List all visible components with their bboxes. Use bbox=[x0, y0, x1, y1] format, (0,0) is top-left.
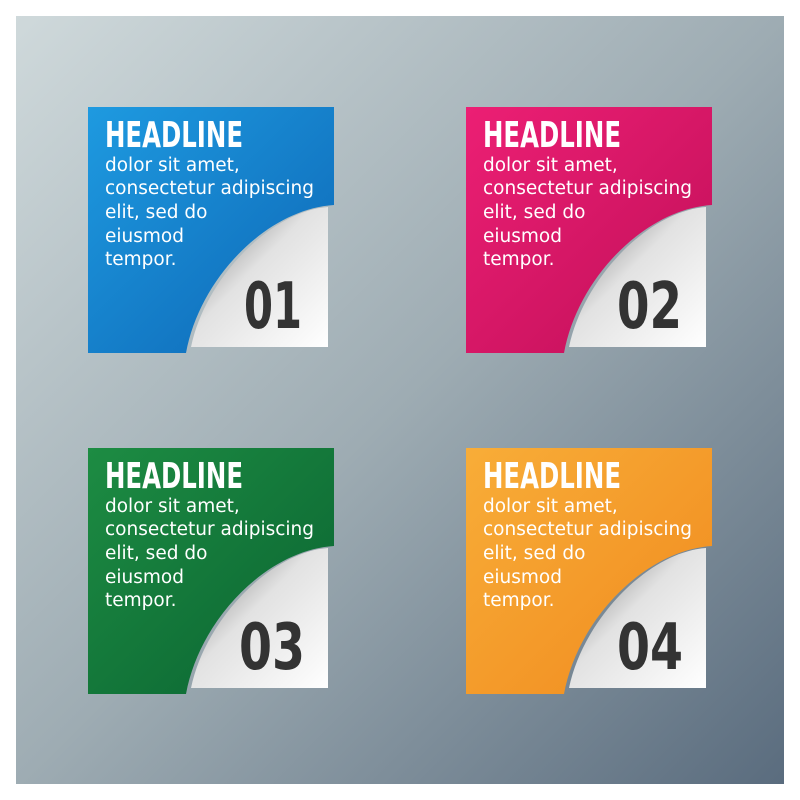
card 2 bbox=[466, 107, 712, 353]
card 2: tempor. bbox=[483, 249, 555, 270]
card 3: consectetur adipiscing bbox=[105, 519, 314, 540]
card 4: consectetur adipiscing bbox=[483, 519, 692, 540]
card 2: eiusmod bbox=[483, 226, 562, 247]
card 1: tempor. bbox=[105, 249, 177, 270]
card 1: dolor sit amet, bbox=[105, 155, 240, 176]
card 3: dolor sit amet, bbox=[105, 496, 240, 517]
card 2: HEADLINE bbox=[483, 115, 621, 156]
card 2: dolor sit amet, bbox=[483, 155, 618, 176]
card 1 bbox=[88, 107, 334, 353]
card 4: 04 bbox=[617, 611, 683, 685]
card 4: eiusmod bbox=[483, 567, 562, 588]
card 1: HEADLINE bbox=[105, 115, 243, 156]
card 3: elit, sed do bbox=[105, 543, 207, 564]
card 1: eiusmod bbox=[105, 226, 184, 247]
card 4: dolor sit amet, bbox=[483, 496, 618, 517]
card 3: eiusmod bbox=[105, 567, 184, 588]
card 1: elit, sed do bbox=[105, 202, 207, 223]
card 3: 03 bbox=[239, 611, 305, 685]
card 2: elit, sed do bbox=[483, 202, 585, 223]
card 4 bbox=[466, 448, 712, 694]
card 1: 01 bbox=[244, 270, 302, 344]
card 3: HEADLINE bbox=[105, 456, 243, 497]
card 1: consectetur adipiscing bbox=[105, 178, 314, 199]
card 3 bbox=[88, 448, 334, 694]
card 4: HEADLINE bbox=[483, 456, 621, 497]
card 3: tempor. bbox=[105, 590, 177, 611]
card 2: consectetur adipiscing bbox=[483, 178, 692, 199]
card 4: tempor. bbox=[483, 590, 555, 611]
card 2: 02 bbox=[617, 270, 682, 344]
card 4: elit, sed do bbox=[483, 543, 585, 564]
